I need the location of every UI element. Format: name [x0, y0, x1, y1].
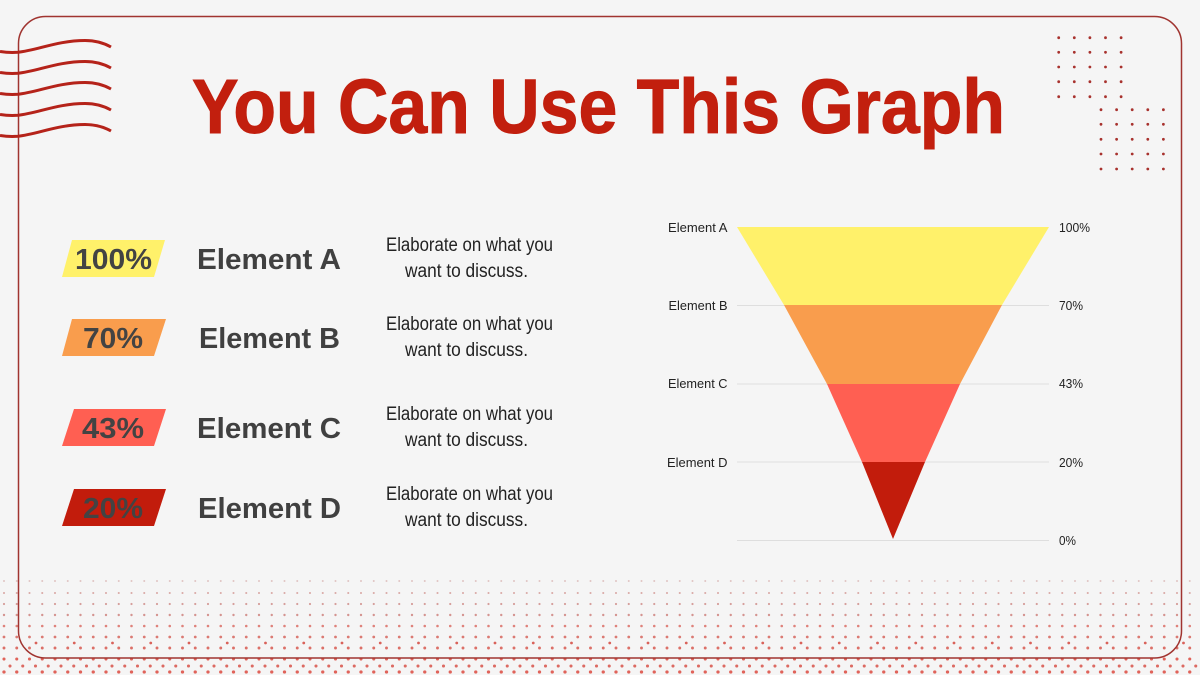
- funnel value labels: 100%: [1059, 221, 1090, 235]
- label: Element A: Element A: [197, 244, 341, 276]
- row: Element C: [62, 404, 553, 451]
- label: Element B: Element B: [199, 323, 340, 355]
- badge: 70%: 70%: [83, 323, 143, 355]
- label: Element D: Element D: [198, 493, 341, 525]
- description: Element C: want to discuss.: [404, 430, 528, 451]
- description: Element D: want to discuss.: [404, 510, 528, 531]
- funnel segment: Element C: [827, 384, 960, 462]
- funnel value labels: 20%: [1059, 456, 1083, 470]
- label: Element C: Element C: [197, 413, 341, 445]
- row: Element D: [62, 484, 553, 531]
- badge: 20%: [62, 489, 166, 526]
- badge: 100%: [62, 240, 165, 277]
- funnel value labels: 0%: [1059, 534, 1076, 548]
- funnel segment: Element D: [862, 462, 925, 539]
- funnel value labels: 43%: [1059, 377, 1083, 391]
- funnel segment: Element B: [784, 305, 1002, 384]
- dot grids: top right: [1059, 38, 1166, 169]
- description: Element A: Elaborate on what you: [386, 235, 553, 256]
- badge: 43%: [62, 409, 166, 446]
- decorative wavy lines: top left: [0, 40, 111, 137]
- badge: 20%: 20%: [83, 493, 143, 525]
- description: Element B: want to discuss.: [404, 340, 528, 361]
- description: Element C: Elaborate on what you: [386, 404, 553, 425]
- funnel category labels: Element A: [668, 221, 728, 235]
- halftone dot pattern: bottom: [4, 581, 1200, 672]
- row: Element B: [62, 314, 553, 361]
- title: You Can Use This Graph: [192, 64, 1005, 150]
- description: Element B: Elaborate on what you: [386, 314, 553, 335]
- badge: 70%: [62, 319, 166, 356]
- funnel category labels: Element C: [668, 377, 728, 391]
- funnel category labels: [667, 221, 728, 470]
- funnel category labels: Element D: [667, 456, 728, 470]
- funnel segment: Element A: [737, 227, 1049, 305]
- description: Element D: Elaborate on what you: [386, 484, 553, 505]
- badge: 100%: 100%: [75, 244, 152, 276]
- badge: 43%: 43%: [82, 413, 144, 445]
- funnel value labels: 70%: [1059, 299, 1083, 313]
- description: Element A: want to discuss.: [404, 261, 528, 282]
- funnel value labels: [1059, 221, 1090, 548]
- funnel chart: [667, 221, 1090, 548]
- funnel category labels: Element B: [668, 299, 728, 313]
- row: Element A: [62, 235, 553, 282]
